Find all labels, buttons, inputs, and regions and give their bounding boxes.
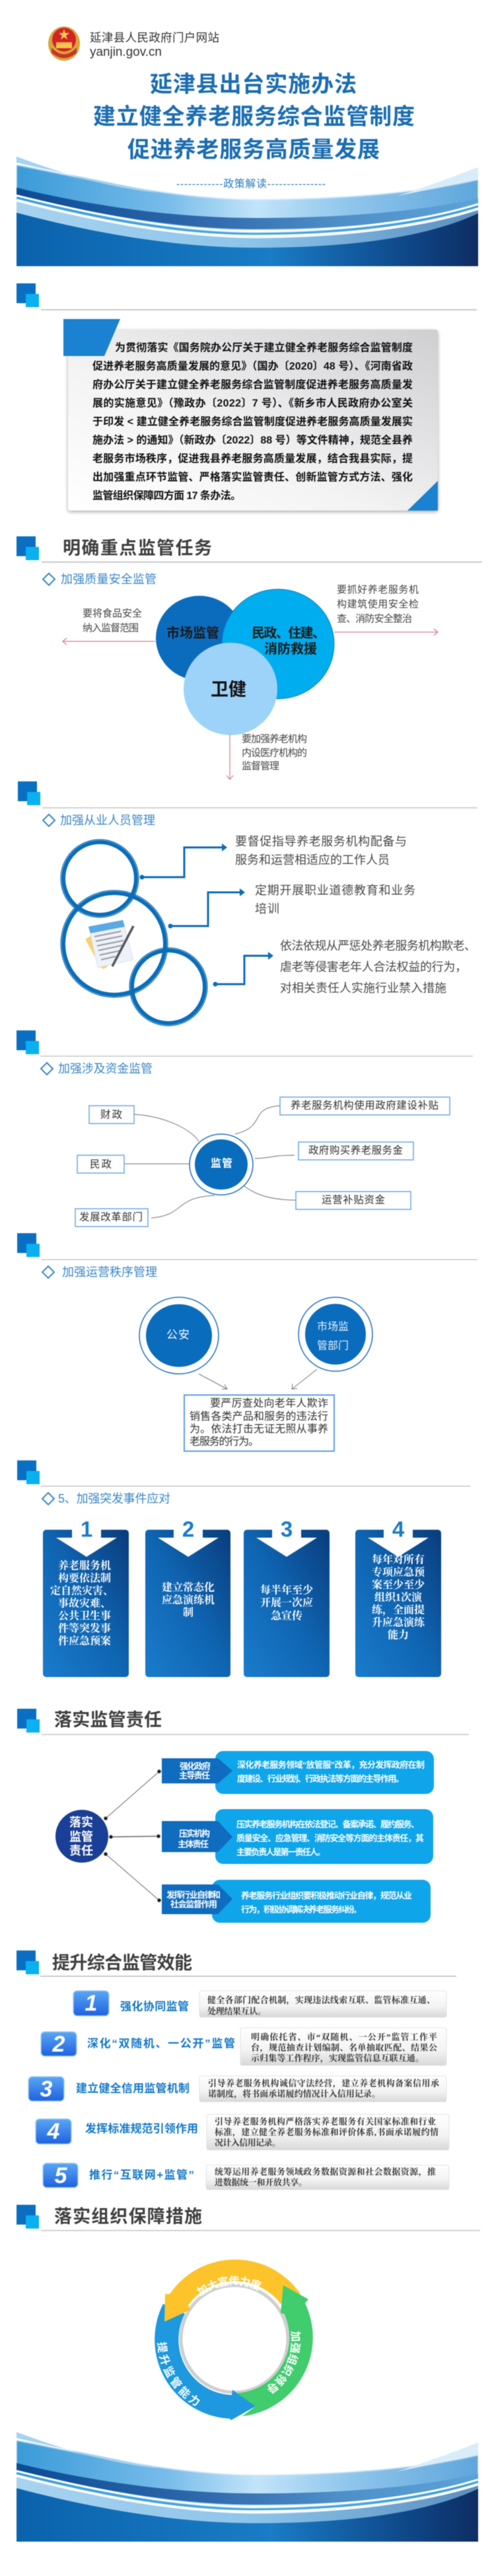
section marker: operations [17,1233,40,1257]
box labels: 发展改革部门 [79,1211,143,1223]
card 2: drill mechanism [145,1517,230,1677]
card 4: annual drills: 升应急演练 [372,1617,426,1629]
item 2: double random: 明确依托省、市“双随机、一公开”监管工作平 [251,2032,437,2042]
subheading: operations order: 加强运营秩序管理 [62,1266,157,1279]
intro paragraph: 府办公厅关于建立健全养老服务综合监管制度促进养老服务高质量发 [92,378,413,391]
arrow: medical institutions [227,734,233,779]
header: site emblem and name [48,26,219,61]
branch 2: institutions: 主体责任 [178,1839,209,1849]
box labels [79,1099,439,1223]
cycle diagram: safeguards ring [154,2259,313,2420]
branch 1: government: 度建设、行业规划、行政执法等方面的主导作用。 [237,1774,404,1783]
branch 1: government: 强化政府 [180,1761,211,1771]
note: medical institutions: 要加强养老机构 [242,733,307,745]
text: staff requirements: 依法依规从严惩处养老服务机构欺老、 [280,939,476,952]
card 4: annual drills [355,1517,441,1677]
site url: yanjin.gov.cn [90,45,162,59]
center node [190,1134,253,1195]
branch lines [104,1770,161,1902]
intro paragraph: 监管组织保障四方面 17 条办法。 [92,489,241,502]
branch 2: institutions: 质量安全、应急管理、消防安全等方面的主体责任，其 [236,1834,424,1843]
intro paragraph: 于印发 < 建立健全养老服务综合监管制度促进养老服务高质量发展实 [92,415,413,428]
item 1: coordinated supervision [73,1991,446,2017]
card 1: emergency plans: 公共卫生事 [58,1609,111,1622]
intro paragraph: 促进养老服务高质量发展的意见》（国办〔2020〕48 号）、《河南省政 [92,359,413,373]
enforcement text box: 为。依法打击无证无照从事养 [190,1423,328,1435]
policy reading caption: ------------政策解读--------------- [176,178,326,190]
heading: implement responsibility: 落实监管责任 [54,1710,162,1730]
item 5: internet plus supervision [43,2163,449,2190]
card 1: emergency plans: 件应急预案 [58,1634,111,1647]
card 4: annual drills: 4 [392,1517,405,1542]
item 5: internet plus supervision: 5 [55,2163,68,2188]
item 4: standards: 引导养老服务机构严格落实养老服务有关国家标准和行业 [215,2116,436,2127]
card 1: emergency plans: 构要依法制 [58,1572,111,1584]
intro paragraph: 施办法 > 的通知》（新政办〔2022〕88 号）等文件精神，规范全县养 [92,433,413,447]
item 4: standards [36,2114,449,2150]
item 3: credit supervision: 建立健全信用监管机制 [76,2082,190,2095]
branch 2: institutions [162,1809,433,1864]
department labels: 消防救援 [264,641,317,657]
arrow: building safety [334,629,438,635]
enforcement text box: 销售各类产品和服务的违法行 [190,1411,328,1423]
intro paragraph: 出加强重点环节监管、严格落实监管责任、创新监管方式方法、强化 [92,470,413,483]
department labels: 卫健 [211,680,246,699]
box labels: 民政 [90,1159,112,1170]
ring labels: 提升监管能力 [156,2341,201,2407]
card 1: emergency plans [43,1517,129,1677]
node: public security [139,1297,219,1374]
item 3: credit supervision: 引导养老服务机构诚信守法经营，建立养老机构备案信用承 [208,2078,439,2089]
item 5: internet plus supervision: 进数据统一和开放共享。 [215,2177,307,2188]
note: medical institutions: 监督管理 [242,761,279,771]
card 2: drill mechanism: 建立常态化 [162,1581,215,1593]
connector arrows: staff items [140,843,273,987]
subheading: emergency response: 5、加强突发事件应对 [58,1492,170,1505]
department labels: 民政、住建、 [252,626,326,641]
item 4: standards: 况计入信用记录。 [215,2137,281,2148]
card 2: drill mechanism: 应急演练机 [162,1593,215,1606]
item 3: credit supervision: 3 [40,2077,53,2102]
node: market regulator [299,1297,372,1371]
circle: market regulation [156,596,243,680]
branch 3: industry: 行为，积极协调解决养老服务纠纷。 [241,1905,362,1914]
card 1: emergency plans: 件等突发事 [58,1622,111,1634]
branch 3: industry: 发挥行业自律和 [166,1890,221,1900]
site name: 延津县人民政府门户网站 [90,31,219,44]
card 2: drill mechanism: 2 [182,1517,194,1542]
center ellipse: 落实 [69,1815,93,1829]
arrows to enforcement box [199,1369,317,1389]
item 5: internet plus supervision: 统筹运用养老服务领域政务数据资源和社会数据资源，推 [215,2166,436,2177]
text: staff requirements [235,835,476,995]
card 3: publicity [244,1517,330,1677]
branch 3: industry: 养老服务行业组织要积极推动行业自律，规范从业 [241,1890,412,1901]
blue triangle corner [407,481,438,511]
connector lines [124,1106,297,1218]
text: staff requirements: 定期开展职业道德教育和业务 [255,884,415,897]
heading: key supervision tasks: 明确重点监管任务 [63,538,212,558]
box labels: 养老服务机构使用政府建设补贴 [291,1099,439,1111]
diagram: responsibility branches [55,1751,434,1923]
text: staff requirements: 对相关责任人实施行业禁入措施 [280,982,446,995]
subheading: funds supervision: 加强涉及资金监管 [58,1062,153,1075]
venn diagram: three departments [156,589,334,735]
card 4: annual drills: 每年对所有 [372,1554,425,1565]
note: building safety: 构建筑使用安全检 [337,598,419,610]
circle: civil affairs, housing, fire rescue [222,589,334,699]
center node: 监管 [211,1157,232,1169]
bottom wave banner [17,2432,478,2542]
branch 2: institutions: 压实养老服务机构在依法登记、备案承诺、履约服务、 [236,1819,419,1830]
ring labels: 加大宣传力度 [197,2275,262,2297]
circle: health [184,643,277,735]
ring labels [156,2275,301,2407]
heading: implement responsibility [17,1709,162,1733]
heading: improve effectiveness: 提升综合监管效能 [52,1953,192,1973]
node: market regulator: 管部门 [317,1340,349,1351]
panel: intro text [63,319,438,511]
icon: document and pen [85,920,133,969]
heading: improve effectiveness [17,1950,192,1974]
note: building safety: 要抓好养老服务机 [337,584,419,596]
card 4: annual drills: 练，全面提 [372,1604,425,1617]
icon: national emblem [48,26,80,61]
item 4: standards: 发挥标准规范引领作用 [85,2122,198,2135]
card 1: emergency plans: 1 [81,1517,92,1542]
intro paragraph: 展的实施意见》（豫政办〔2022〕7 号）、《新乡市人民政府办公室关 [92,396,413,410]
note: food safety: 要将食品安全 [83,608,142,620]
item 4: standards: 4 [47,2119,60,2144]
card 4: annual drills: 案至少至少 [372,1579,425,1591]
item 1: coordinated supervision: 健全各部门配合机制，实现违法线索互联、监管标准互通、 [207,1995,435,2005]
text: staff requirements: 要督促指导养老服务机构配备与 [235,835,407,848]
card 2: drill mechanism: 制 [183,1606,193,1618]
arc: blue, supervision capacity [155,2304,256,2420]
item 2: double random: 深化“双随机、一公开”监管 [87,2037,235,2050]
node: market regulator: 市场监 [317,1321,349,1333]
heading: organisational safeguards [17,2205,202,2229]
section marker: funds [17,1030,39,1054]
item 3: credit supervision [28,2076,446,2102]
note: food safety [83,608,142,634]
top wave banner [17,157,478,266]
chart: linked rings [61,840,207,1026]
intro paragraph: 为贯彻落实《国务院办公厅关于建立健全养老服务综合监管制度 [115,341,413,354]
section marker: staff [18,781,40,805]
item 2: double random: 台，规范抽查计划编制、名单抽取匹配、结果公 [251,2042,437,2053]
center ellipse [55,1810,108,1863]
branch 1: government: 深化养老服务领域“放管服”改革，充分发挥政府在制 [237,1760,425,1770]
arc: green, leadership [236,2285,313,2416]
card 3: publicity: 3 [281,1517,293,1542]
card 3: publicity: 每半年至少 [260,1584,314,1596]
main title: 促进养老服务高质量发展 [127,137,380,162]
note: building safety [337,584,419,625]
blue parallelogram corner [63,319,120,356]
item 1: coordinated supervision: 强化协同监管 [120,2000,189,2013]
center ellipse: 监管 [69,1830,93,1843]
section marker: emergencies [17,1460,40,1484]
branch 1: government: 主导责任 [179,1770,210,1781]
item 3: credit supervision: 诺制度，将书面承诺履约情况计入信用记录。 [208,2089,380,2099]
box labels: 运营补贴资金 [322,1194,385,1206]
intro paragraph: 老服务市场秩序，促进我县养老服务高质量发展，结合我县实际，提 [92,452,413,465]
enforcement text box [184,1395,334,1451]
item 2: double random [41,2028,446,2065]
branch 2: institutions: 主要负责人是第一责任人。 [236,1847,326,1857]
item 2: double random: 示归集等工作程序，实现监管信息互联互通。 [251,2053,424,2063]
arrow: food safety [63,638,155,645]
note: medical institutions: 内设医疗机构的 [242,748,307,758]
item 5: internet plus supervision: 推行“互联网+监管” [89,2168,194,2181]
box labels: 财政 [100,1108,122,1120]
heading: key supervision tasks [17,536,212,560]
main title [93,72,415,162]
intro paragraph [92,341,413,502]
note: food safety: 纳入监督范围 [83,622,139,634]
left boxes [75,1097,450,1227]
card 4: annual drills: 能力 [388,1629,409,1641]
enforcement text box: 要严厉查处向老年人欺诈 [210,1398,328,1410]
department labels [166,625,326,699]
mind map: funds supervision [75,1097,450,1227]
card 1: emergency plans: 养老服务机 [58,1559,111,1572]
item 4: standards: 标准，建立健全养老服务标准和评价体系,书面承诺履约情 [215,2127,439,2137]
section marker: intro [17,283,39,307]
note: medical institutions [242,733,307,771]
ring labels: 加强组织领导 [267,2330,301,2394]
heading: organisational safeguards: 落实组织保障措施 [54,2207,202,2227]
text: staff requirements: 虐老等侵害老年人合法权益的行为， [280,960,467,974]
text: staff requirements: 培训 [255,902,279,915]
box labels: 政府购买养老服务金 [308,1144,403,1156]
card 3: publicity: 开展一次应 [260,1596,313,1609]
card 1: emergency plans: 定自然灾害、 [50,1584,114,1597]
note: building safety: 查、消防安全整治 [337,613,412,625]
branch 1: government [162,1751,434,1794]
center ellipse: 责任 [69,1844,93,1857]
item 1: coordinated supervision: 处理结果互认。 [207,2007,266,2016]
arc: yellow, publicity [164,2260,300,2322]
main title: 延津县出台实施办法 [150,72,357,97]
subheading: staff management: 加强从业人员管理 [60,814,155,827]
item 2: double random: 2 [52,2032,65,2057]
branch 2: institutions: 压实机构 [179,1828,210,1839]
card 3: publicity: 急宣传 [271,1609,302,1622]
item 1: coordinated supervision: 1 [85,1991,97,2016]
subheading: quality and safety: 加强质量安全监管 [61,573,157,586]
branch 3: industry [162,1880,431,1923]
node: public security: 公安 [166,1329,190,1341]
enforcement text box: 老服务的行为。 [190,1436,259,1448]
card 4: annual drills: 专项应急预 [372,1565,425,1579]
department labels: 市场监管 [166,625,219,641]
card 4: annual drills: 组织1次演 [374,1591,424,1604]
text: staff requirements: 服务和运营相适应的工作人员 [235,853,390,867]
main title: 建立健全养老服务综合监管制度 [93,104,415,129]
card 1: emergency plans: 事故灾难、 [58,1597,111,1609]
branch 3: industry: 社会监督作用 [170,1900,217,1909]
